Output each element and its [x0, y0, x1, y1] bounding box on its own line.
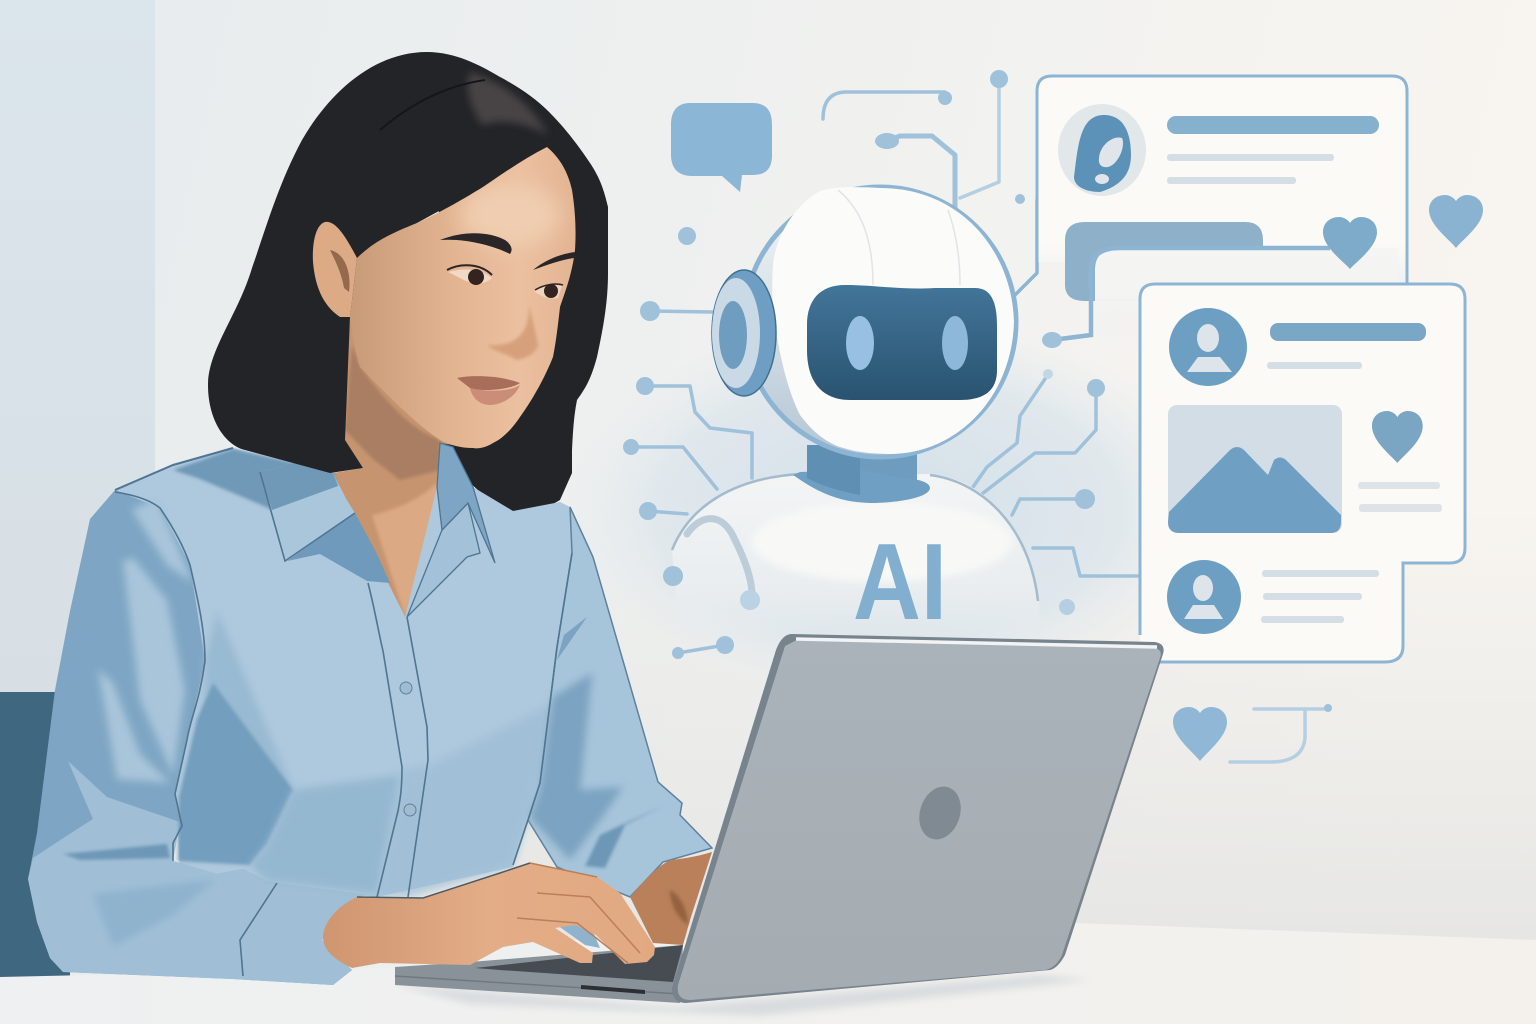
text placeholder lines: [1167, 116, 1379, 184]
woman: [28, 52, 1164, 1003]
robot visor: [807, 285, 997, 400]
robot: [663, 187, 1040, 643]
right eye: [534, 284, 563, 299]
laptop lid surface: [678, 640, 1161, 1000]
right hand: [630, 852, 712, 945]
neck shadow: [345, 345, 440, 480]
circuit traces and nodes: [623, 70, 1140, 659]
left arm: [28, 490, 367, 985]
chest skin highlight: [372, 480, 442, 617]
avatar: back post: [1058, 104, 1146, 196]
torso: [115, 443, 572, 897]
right eyebrow: [533, 252, 575, 270]
icon: floating heart right: [1429, 195, 1483, 248]
icon: heart below cards: [1173, 707, 1227, 761]
robot head: [712, 187, 1016, 457]
chat bubble icon: [671, 103, 772, 192]
thumb gap sleeve: [557, 925, 600, 948]
robot ear: [712, 270, 776, 396]
port: [581, 985, 645, 994]
lid top edge highlight: [796, 639, 1157, 647]
chair back: [0, 692, 70, 985]
finger lines: [517, 863, 640, 963]
ear: [313, 222, 357, 317]
shirt buttons: [400, 682, 416, 816]
table: [0, 923, 1536, 1024]
hair sheen: [468, 72, 548, 135]
robot body: [663, 474, 1040, 640]
placeholder lines top: [1267, 323, 1426, 369]
left eyebrow: [440, 233, 512, 254]
placeholder lines bottom: [1261, 570, 1379, 623]
hair strand: [380, 80, 485, 130]
hand shape: [323, 863, 655, 968]
inner ear: [330, 250, 350, 292]
laptop logo: [913, 781, 967, 845]
wrist outline: [357, 863, 530, 898]
base front lip: [395, 976, 680, 994]
trace end node: [1042, 332, 1062, 348]
card: back post: [1037, 76, 1407, 301]
robot neck: [793, 445, 930, 503]
nose: [487, 305, 538, 360]
icon: heart on front post: [1372, 411, 1423, 463]
hair back: [420, 77, 608, 513]
left collar: [260, 463, 390, 583]
connector below cards: [1230, 704, 1332, 762]
comment block: [1065, 222, 1263, 301]
card: middle sheet: [1095, 248, 1398, 350]
laptop: [395, 634, 1164, 1003]
hair front: [208, 52, 570, 473]
card: front post: [1140, 284, 1465, 662]
lips: [457, 376, 520, 405]
image placeholder: [1168, 405, 1342, 533]
forehead highlight: [460, 183, 560, 247]
sheet outline and trace: [1052, 248, 1330, 340]
icon: heart on back post: [1323, 217, 1377, 269]
right collar: [407, 443, 495, 617]
laptop base: [395, 945, 683, 1003]
face: [313, 147, 576, 448]
shirt shading: [63, 449, 665, 947]
placeholder lines right: [1358, 482, 1442, 512]
keyboard: [475, 945, 683, 982]
shirt seams and placket: [115, 448, 572, 976]
robot eyes: [846, 316, 968, 370]
left hand typing: [323, 863, 655, 968]
laptop lid shell: [672, 634, 1164, 1003]
avatar: front post bottom: [1167, 560, 1241, 634]
robot AI label: AI: [853, 521, 947, 643]
right sleeve: [528, 507, 712, 897]
neck: [333, 317, 473, 617]
forearm: [28, 761, 367, 985]
left eye: [447, 265, 492, 285]
shirt: [28, 443, 712, 985]
avatar: front post top: [1169, 308, 1247, 386]
